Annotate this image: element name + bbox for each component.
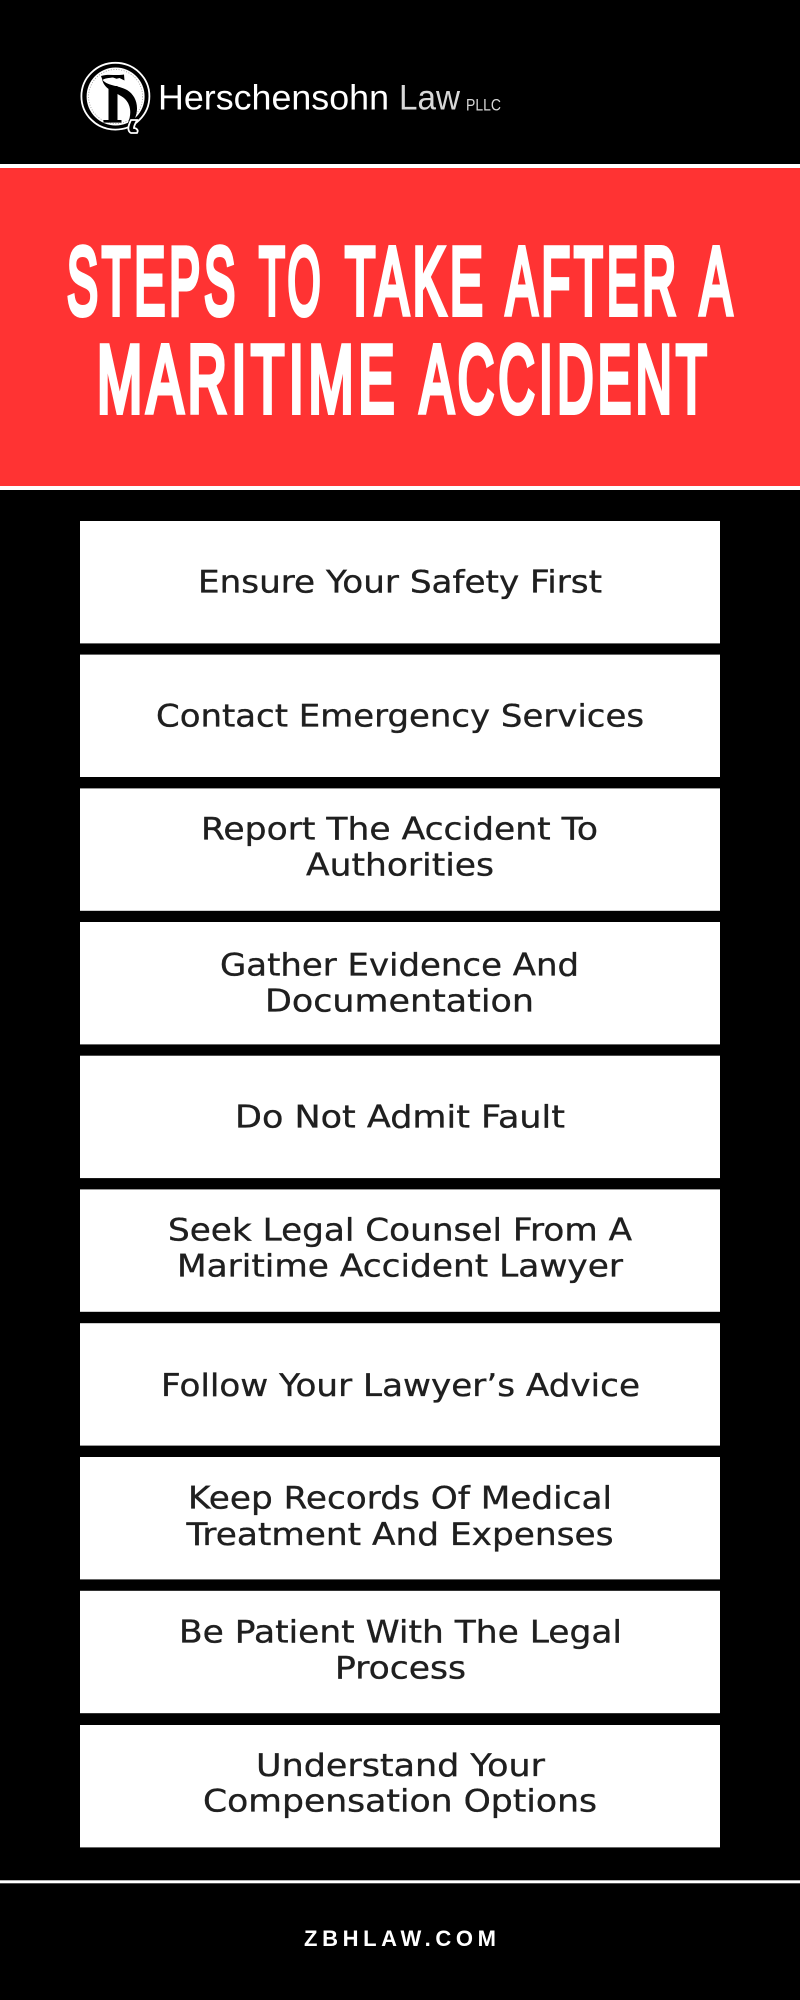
step 6 card [80,1189,720,1312]
footer website: ZBHLAW.COM [304,1926,496,1951]
logo wordmark: Herschensohn [158,78,389,117]
step 8 card [80,1457,720,1579]
step 6 card: Seek Legal Counsel From A [168,1213,632,1249]
step 3 card [80,788,720,911]
step 9 card: Process [335,1651,466,1687]
step 4 card: Documentation [265,984,534,1020]
step 9 card [80,1591,720,1713]
title: MARITIME [97,326,399,433]
step 8 card: Keep Records Of Medical [188,1481,612,1517]
logo: Herschensohn Law PLLC [81,63,501,133]
step 1 card: Ensure Your Safety First [198,565,602,601]
title: TAKE [345,228,487,335]
step 1 card [80,521,720,643]
title banner: A [700,228,736,335]
step 7 card: Follow Your Lawyer’s Advice [161,1368,640,1404]
step 2 card: Contact Emergency Services [156,699,644,735]
step 2 card [80,655,720,777]
step 5 card [80,1056,720,1178]
step 6 card: Maritime Accident Lawyer [177,1249,623,1285]
logo wordmark: Law [399,78,461,117]
title: STEPS [67,228,239,335]
step 10 card: Compensation Options [203,1784,597,1820]
step 5 card: Do Not Admit Fault [235,1100,565,1136]
step 10 card [80,1725,720,1847]
step 4 card [80,922,720,1044]
step 9 card: Be Patient With The Legal [179,1615,622,1651]
title: TO [259,228,324,335]
step 8 card: Treatment And Expenses [185,1517,614,1553]
title banner [0,164,800,490]
icon: monogram seal [81,63,149,133]
step 7 card [80,1323,720,1446]
step 4 card: Gather Evidence And [220,948,579,984]
step 10 card: Understand Your [256,1748,545,1784]
step 3 card: Report The Accident To [201,811,598,847]
title [67,228,736,433]
logo wordmark: PLLC [466,96,501,114]
step 3 card: Authorities [306,847,494,883]
logo wordmark [158,78,501,117]
